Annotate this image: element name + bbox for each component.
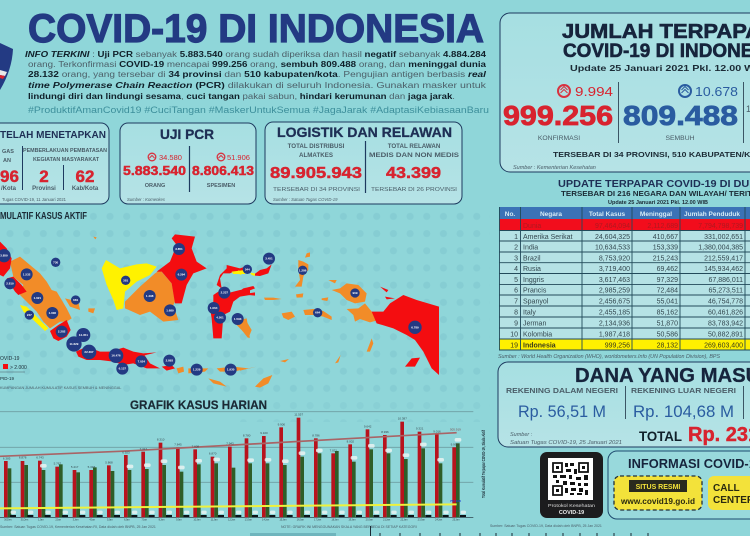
table: world cases: 269,603,400 xyxy=(704,342,743,350)
map bubbles: province case counts: 1.286 xyxy=(299,268,307,272)
chart: daily cases bars: 2Jan xyxy=(55,518,62,522)
panel: telah menetapkan: TELAH MENETAPKAN xyxy=(0,129,106,141)
chart: daily cases bars: 3Jan xyxy=(73,518,79,522)
map bubbles: province case counts: 1.689 xyxy=(166,308,174,312)
table: world cases: 9 xyxy=(514,320,518,328)
panel: telah menetapkan: KEGIATAN MASYARAKAT xyxy=(33,157,100,163)
map bubbles: province case counts: 14.451 xyxy=(79,333,88,337)
chart: daily cases bars: 19Jan xyxy=(348,518,356,522)
chart: daily cases bars: 9.994 xyxy=(451,442,458,446)
map bubbles: province case counts: 1.006 xyxy=(49,311,56,315)
panel: informasi covid xyxy=(608,451,750,519)
map bubbles: province case counts: 909 xyxy=(353,291,358,295)
chart: daily cases bars: 31Des xyxy=(21,518,29,522)
chart: daily cases bars: 8.310 xyxy=(157,438,165,442)
table: world cases: 2,456,675 xyxy=(599,298,630,306)
panel: telah menetapkan: PEMBERLAKUAN PEMBATASAN xyxy=(23,148,107,154)
world update heading xyxy=(558,178,750,206)
chart: daily cases bars: 17Jan xyxy=(314,518,322,522)
call center badge xyxy=(708,476,750,510)
panel: dana yang masuk: Satuan Tugas COVID-19, 25 Januari 2021 xyxy=(510,440,622,446)
chart: daily cases bars: 30Des xyxy=(4,518,12,522)
title: COVID-19 DI INDONESIA xyxy=(28,7,484,51)
table: world cases xyxy=(499,207,750,350)
chart: daily cases bars: 9.642 xyxy=(364,424,372,428)
chart footnotes: Sumber: Satuan Tugas COVID-19, Data diolah oleh BNPB, 25 Jan 2021 xyxy=(490,524,602,528)
table: world cases: 72,484 xyxy=(657,288,678,294)
map legend: OVID-19 xyxy=(0,356,20,362)
chart: daily cases bars: 7Jan xyxy=(141,518,148,522)
chart: daily cases bars: 21Jan xyxy=(383,518,391,522)
chart: daily cases bars: 9Jan xyxy=(176,518,182,522)
table: world cases: 2,985,259 xyxy=(599,288,630,294)
chart: daily cases bars: 20Jan xyxy=(366,518,373,522)
chart: daily cases bars: 22Jan xyxy=(400,518,408,522)
intro text block: 28.132 orang, yang tersebar di 34 provinsi dan 510 kabupaten/kota . Pengujian antigen berbasis real xyxy=(28,69,487,79)
panel: uji pcr: 8.806.413 xyxy=(192,164,254,178)
map bubbles: province case counts: 1.064 xyxy=(210,306,218,310)
logo shield xyxy=(0,43,13,90)
table: world cases: 85,162 xyxy=(657,310,678,316)
chart: daily cases bars: 8Jan xyxy=(159,518,165,522)
table: world cases: 145,934,462 xyxy=(704,266,743,273)
table: world cases: Italy xyxy=(523,310,536,316)
table: world cases: 153,339 xyxy=(653,244,678,252)
chart: daily cases bars: 5.318 xyxy=(88,465,95,469)
map bubbles: province case counts: 1.021 xyxy=(34,296,41,300)
qr code card: Protokol Kesehatan xyxy=(548,503,596,508)
table: world cases: Indonesia xyxy=(523,342,556,350)
chart axis label: Total Kumulatif Terpapar COVID-19, Skala Aktif xyxy=(481,430,486,498)
panel: dana yang masuk: REKENING LUAR NEGERI xyxy=(631,386,736,395)
panel: logistik dan relawan: 89.905.943 xyxy=(270,165,362,182)
panel: dana yang masuk xyxy=(498,362,750,447)
panel: dana yang masuk: Rp. 104,68 M xyxy=(633,402,734,421)
chart: daily cases bars: 7.021 xyxy=(330,448,337,452)
chart: daily cases bars: 4Jan xyxy=(89,518,96,522)
panel: jumlah terpapar indonesia: KONFIRMASI xyxy=(538,135,580,142)
panel: logistik dan relawan: ALMATKES xyxy=(299,152,333,159)
intro text block: INFO TERKINI : Uji PCR sebanyak 5.883.540 orang sudah diperiksa dan hasil negatif sebanyak 4.884.284 xyxy=(25,49,486,59)
table: world cases: Dunia xyxy=(523,223,541,230)
qr code card: COVID-19 xyxy=(559,510,584,516)
map bubbles: province case counts: 2.893 xyxy=(166,359,173,363)
qr code card xyxy=(540,452,603,518)
map bubbles: province case counts: 730 xyxy=(53,260,58,264)
world update heading: Update 25 Januari 2021 Pkl. 12.00 WIB xyxy=(608,200,708,206)
panel: uji pcr: SPESIMEN xyxy=(207,183,235,189)
panel: telah menetapkan: 2 xyxy=(39,167,49,186)
chart: daily cases bars: 5.868 xyxy=(105,460,113,464)
chart: daily cases bars xyxy=(0,412,473,522)
panel: logistik dan relawan: Sumber : Satuan Tugas COVID-19 xyxy=(273,197,338,202)
table: world cases: 410,667 xyxy=(653,234,678,241)
panel: uji pcr: Sumber : Komenkes xyxy=(127,197,166,202)
table: world cases: Jumlah Penduduk xyxy=(684,211,740,218)
table: world cases: 215,243 xyxy=(653,256,678,262)
chart: daily cases bars: 25Jan xyxy=(452,518,460,522)
map bubbles: province case counts: 2.237 xyxy=(221,291,228,295)
chart: daily cases bars: 5.417 xyxy=(71,465,79,469)
panel: logistik dan relawan: TOTAL RELAWAN xyxy=(388,143,441,150)
map heading: MULATIF KASUS AKTIF xyxy=(0,211,87,222)
chart: daily cases bars: 14Jan xyxy=(262,518,270,522)
table: world cases: 67,886,011 xyxy=(708,277,743,284)
table: world cases: 3 xyxy=(514,256,518,262)
chart: daily cases bars: 10Jan xyxy=(193,518,201,522)
map: eastern indonesia xyxy=(237,252,439,388)
table: world cases: 8,753,920 xyxy=(599,256,630,262)
chart footnotes: Sumber: Satuan Tugas COVID-19, Kementerian Kesehatan RI, Data diolah oleh BNPB, 25 Jan 2021 xyxy=(0,525,156,529)
panel: logistik dan relawan: LOGISTIK DAN RELAWAN xyxy=(277,124,452,140)
map bubbles: province case counts: 3.851 xyxy=(175,247,183,251)
chart: daily cases bars: 6.878 xyxy=(19,456,27,460)
table: world cases: 51,870 xyxy=(657,320,678,328)
chart: daily cases bars: 1Jan xyxy=(38,518,44,522)
panel: dana yang masuk: REKENING DALAM NEGERI xyxy=(506,386,618,395)
chart: daily cases bars: 6.870 xyxy=(209,452,217,456)
map bubbles: province case counts: 381 xyxy=(123,278,128,282)
table: world cases: 7 xyxy=(514,298,518,306)
panel: jumlah terpapar indonesia: 10.678 xyxy=(695,85,738,99)
hashtags: #ProduktifAmanCovid19 #CuciTangan #MaskerUntukSemua #JagaJarak #AdaptasiKebiasaanBaru xyxy=(28,105,489,115)
table: world cases: 331,002,651 xyxy=(704,234,743,241)
chart: daily cases bars: 15Jan xyxy=(279,518,287,522)
map bubbles: province case counts: 1.498 xyxy=(146,294,154,298)
panel: logistik dan relawan: TERSEBAR DI 34 PROVINSI xyxy=(273,187,360,193)
table: world cases: 60,461,826 xyxy=(708,310,743,316)
intro text block: time Polymerase Chain Reaction (PCR) dilakukan di seluruh Indonesia. Gunakan masker untuk xyxy=(28,80,487,90)
map bubbles: province case counts: 2.282 xyxy=(58,330,66,334)
table: world cases: 69,462 xyxy=(657,266,678,273)
table: world cases: 7,794,798,739 xyxy=(698,223,743,230)
table: world cases: 10 xyxy=(510,332,518,338)
map bubbles: province case counts: 681 xyxy=(73,298,78,302)
table: world cases: 83,783,942 xyxy=(708,320,743,328)
table: world cases: 2,134,936 xyxy=(599,320,630,328)
panel: telah menetapkan: Tugas COVID-19, 11 Januari 2021 xyxy=(2,197,67,202)
panel: logistik dan relawan: TERSEBAR DI 26 PROVINSI xyxy=(371,187,457,193)
website badge xyxy=(614,476,702,510)
map bubbles: province case counts: 1.930 xyxy=(227,368,235,372)
chart: daily cases bars: 16Jan xyxy=(297,518,304,522)
panel: dana yang masuk: Rp. 56,51 M xyxy=(518,402,606,421)
table: world cases: 2,112,689 xyxy=(647,223,678,230)
chart: daily cases bars: 6.923 xyxy=(122,450,130,454)
map bubbles: province case counts: 247 xyxy=(27,313,32,317)
chart: daily cases bars: 11Jan xyxy=(211,518,218,522)
panel: uji pcr: 51.906 xyxy=(227,153,250,162)
table: world cases: 19 xyxy=(510,342,518,350)
table: world cases: 97,329 xyxy=(657,277,678,284)
table: world cases: Amerika Serikat xyxy=(523,234,572,241)
chart: daily cases bars: 10.387 xyxy=(398,417,407,421)
chart: daily cases bars: 6.743 xyxy=(36,456,44,460)
table: world cases: 3,719,400 xyxy=(599,266,630,273)
call center badge: CALL xyxy=(713,483,740,494)
table: world cases: 10,634,533 xyxy=(595,244,630,252)
map bubbles: province case counts xyxy=(0,243,422,376)
table: world cases: Jerman xyxy=(523,320,546,328)
map legend: KUMPANGAN JUMLAH KUMULATIF KASUS SEMBUH & MENINGGAL xyxy=(0,386,121,390)
panel: logistik dan relawan: MEDIS DAN NON MEDIS xyxy=(369,152,459,159)
chart: daily cases bars: 9.321 xyxy=(416,427,424,431)
panel: telah menetapkan: 62 xyxy=(76,167,94,186)
map bubbles: province case counts: 3.859 xyxy=(0,254,8,258)
panel: telah menetapkan: 96 xyxy=(0,167,19,186)
chart: daily cases bars: 23Jan xyxy=(418,518,425,522)
panel: jumlah terpapar indonesia xyxy=(500,13,750,172)
panel: telah menetapkan: Kab/Kota xyxy=(72,186,99,192)
table: world cases: 2 xyxy=(514,244,518,252)
chart heading: GRAFIK KASUS HARIAN xyxy=(130,398,267,412)
map bubbles: province case counts: 3.451 xyxy=(265,257,273,261)
chart: daily cases bars: 7.608 xyxy=(192,444,199,448)
table: world cases: 2,455,185 xyxy=(599,310,630,316)
chart footnotes: NOTE: GRAFIK INI MENGGUNAKAN SKALA YANG BERBEDA DI SETIAP KATEGORI xyxy=(281,525,417,529)
panel: dana yang masuk: Sumber : xyxy=(510,432,533,438)
table: world cases: 212,559,417 xyxy=(704,256,743,262)
chart: daily cases bars: 8.786 xyxy=(312,433,320,437)
table: world cases: 28,132 xyxy=(657,342,678,350)
table: world cases: 4 xyxy=(514,266,518,273)
panel: uji pcr: 5.883.540 xyxy=(123,164,186,178)
chart: daily cases bars: 13Jan xyxy=(245,518,252,522)
website badge: SITUS RESMI xyxy=(636,484,680,491)
panel: uji pcr: 34.580 xyxy=(159,153,182,162)
table: world cases: 6 xyxy=(514,288,518,294)
map bubbles: province case counts: 6.294 xyxy=(178,273,185,277)
table: world cases: 97,464,094 xyxy=(595,223,630,230)
table: world cases: India xyxy=(523,244,538,252)
table: world cases: Spanyol xyxy=(523,298,549,306)
table: world cases: 8 xyxy=(514,310,518,316)
table: world cases: 1 xyxy=(514,234,518,241)
table: world cases: 24,604,325 xyxy=(595,234,630,241)
panel: jumlah terpapar indonesia: 809.488 xyxy=(623,100,738,131)
table: world cases: 55,041 xyxy=(657,298,678,306)
chart: daily cases bars: 18Jan xyxy=(331,518,339,522)
table source: Sumber : World Health Organization (WHO), worldometers.Info (UN Population Division), BPS xyxy=(498,354,720,360)
panel: telah menetapkan: Provinsi xyxy=(32,186,56,192)
map bubbles: province case counts: 1.532 xyxy=(23,272,31,276)
chart: daily cases bars: 8.936 xyxy=(381,430,389,434)
table: world cases: Meninggal xyxy=(640,211,672,218)
table: world cases: 50,586 xyxy=(657,332,678,338)
chart: daily cases bars: 5.767 xyxy=(54,462,61,466)
map bubbles: province case counts: 11.629 xyxy=(70,342,79,346)
table: world cases: Prancis xyxy=(523,288,547,294)
chart: daily cases bars: 6.385 xyxy=(3,456,11,460)
table: world cases: No. xyxy=(505,211,515,218)
map bubbles: province case counts: 6.789 xyxy=(411,325,419,329)
table: world cases: 50,882,891 xyxy=(708,332,743,338)
chart: daily cases bars: 505.919 xyxy=(450,428,461,432)
panel: telah menetapkan xyxy=(0,123,109,204)
world update heading: TERSEBAR DI 216 NEGARA DAN WILAYAH/ TERITORI xyxy=(561,191,750,198)
chart: daily cases bars: 5Jan xyxy=(107,518,113,522)
table: world cases: Negara xyxy=(540,211,562,218)
map legend xyxy=(0,356,121,390)
panel: logistik dan relawan: 43.399 xyxy=(386,165,441,182)
chart: daily cases bars: 9.900 xyxy=(278,422,285,426)
panel: dana yang masuk: TOTAL xyxy=(639,428,682,444)
table: world cases: 65,273,511 xyxy=(708,288,743,294)
chart: daily cases bars: 7.317 xyxy=(140,447,147,451)
panel: uji pcr: UJI PCR xyxy=(160,126,214,142)
panel: jumlah terpapar indonesia: TERSEBAR DI 34 PROVINSI, 510 KABUPATEN/KOTA xyxy=(553,150,750,159)
table: world cases: 5 xyxy=(514,277,518,284)
map bubbles: province case counts: 1.229 xyxy=(193,368,201,372)
table: world cases: 999,256 xyxy=(605,342,630,350)
chart: daily cases bars: 7.845 xyxy=(174,442,182,446)
map bubbles: province case counts: 544 xyxy=(245,267,250,271)
map: western indonesia xyxy=(0,234,250,387)
table: world cases: Inggris xyxy=(523,277,545,284)
table: world cases: Rusia xyxy=(523,266,541,273)
chart: daily cases bars: 9.100 xyxy=(260,431,268,435)
panel: jumlah terpapar indonesia: 999.256 xyxy=(503,100,613,131)
table: world cases: Brazil xyxy=(523,256,541,262)
map legend: > 2.000 xyxy=(10,365,27,371)
map bubbles: province case counts: 22.307 xyxy=(84,350,94,354)
map bubbles: province case counts: 16.476 xyxy=(111,354,121,358)
map bubbles: province case counts: 664 xyxy=(315,311,320,315)
intro text block xyxy=(25,49,487,101)
map bubbles: province case counts: 1.593 xyxy=(234,317,242,321)
chart: daily cases bars: 12Jan xyxy=(228,518,236,522)
table: world cases: 46,754,778 xyxy=(708,298,743,306)
map bubbles: province case counts: 7.024 xyxy=(138,359,145,363)
panel: jumlah terpapar indonesia: Update 25 Januari 2021 Pkl. 12.00 WIB xyxy=(570,64,750,73)
panel: uji pcr: ORANG xyxy=(145,183,165,189)
bottom strip and ticks xyxy=(250,526,648,536)
panel: logistik dan relawan xyxy=(265,122,462,204)
website badge: www.covid19.go.id xyxy=(620,497,695,506)
table: world cases: Kolombia xyxy=(523,332,552,338)
chart: daily cases bars: 8.780 xyxy=(243,433,251,437)
map bubbles: province case counts: 6.137 xyxy=(119,367,126,371)
map bubbles: province case counts: 4.501 xyxy=(216,316,224,320)
table: world cases: Total Kasus xyxy=(589,211,626,218)
map legend: PID-19 xyxy=(0,376,15,381)
panel: jumlah terpapar indonesia: Sumber : Kementerian Kesehatan xyxy=(513,165,596,171)
panel: telah menetapkan: GAS xyxy=(2,149,14,155)
panel: jumlah terpapar indonesia: SEMBUH xyxy=(665,135,695,142)
chart: daily cases bars: 8.002 xyxy=(347,439,354,443)
panel: jumlah terpapar indonesia: 9.994 xyxy=(575,85,613,99)
intro text block: orang. Terkonfirmasi COVID-19 mencapai 999.256 orang, sembuh 809.488 orang, dan meninggal dunia xyxy=(28,59,486,69)
panel: logistik dan relawan: TOTAL DISTRIBUSI xyxy=(288,143,345,150)
chart: daily cases bars: 11.557 xyxy=(294,413,303,417)
chart: daily cases bars: 9.016 xyxy=(433,429,441,433)
chart: daily cases bars: 24Jan xyxy=(435,518,443,522)
chart footnotes xyxy=(0,524,602,529)
map bubbles: province case counts: 2.819 xyxy=(6,282,14,286)
panel: uji pcr xyxy=(120,123,256,204)
chart: daily cases bars: 7.943 xyxy=(226,442,234,446)
panel: telah menetapkan: AN xyxy=(3,158,11,164)
panel: telah menetapkan: /Kota xyxy=(1,186,17,192)
table: world cases: 1,380,004,385 xyxy=(698,244,743,252)
chart: daily cases bars: 6Jan xyxy=(124,518,130,522)
chart: daily cases bars: 757.428 xyxy=(450,499,461,503)
table: world cases: 1,987,418 xyxy=(599,332,630,338)
intro text block: lindungi diri dan lindungi sesama , cuci tangan pakai sabun, hindari kerumunan dan jaga jarak . xyxy=(28,91,455,101)
table: world cases: 3,617,463 xyxy=(599,277,630,284)
